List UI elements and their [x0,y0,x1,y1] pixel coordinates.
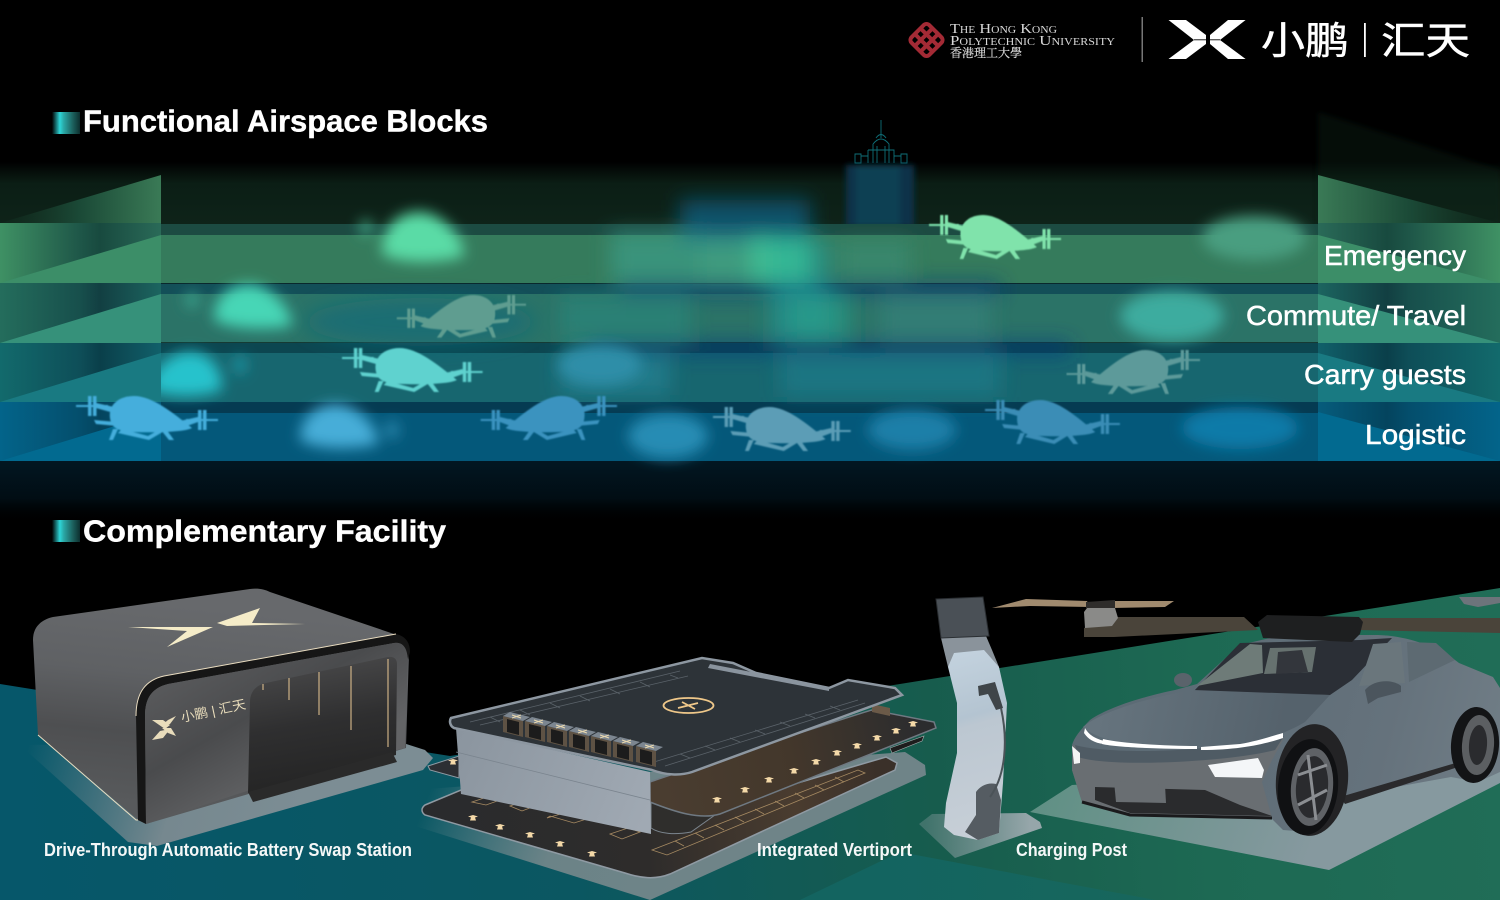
rear rotor blade [1459,597,1500,607]
label: carry guests: Carry guests [1304,359,1466,390]
bottom deck [422,757,897,878]
logo: XPeng AeroHT wordmark: 汇天 [1381,21,1470,63]
logo: XPeng AeroHT wordmark [1261,21,1470,63]
caption: charging post: Charging Post [1016,840,1127,860]
side sill [1340,762,1459,804]
band: emergency [0,224,1500,283]
roof emblem [664,698,714,713]
band: logistic [0,402,1500,461]
building side [456,728,651,834]
platform: flying car [1030,760,1500,870]
front rotor blades [992,599,1174,608]
caption: battery swap station: Drive-Through Automatic Battery Swap Station [44,840,412,860]
fascia upper band [1075,736,1284,763]
charging cable [990,708,1005,797]
bottom parking bays [472,770,865,855]
rear wheel [1448,705,1500,785]
roof battery modules [503,712,663,767]
logo: XPeng mark [1168,20,1246,59]
light edge [38,634,396,820]
hood [1083,690,1330,747]
roof parking grid [470,671,865,766]
post body [944,650,1007,840]
logo: PolyU name: 香港理工大學 [950,45,1022,60]
platform: integrated vertiport [415,752,926,900]
band: commute [0,284,1500,342]
right wall [1318,175,1500,461]
bottom lip [1082,802,1272,818]
eVTOL: logistic far left [76,396,218,440]
wire skyline tower [855,120,907,163]
blurred eVTOLs [150,212,1306,458]
station emblem and name: 小鹏 | 汇天 [180,697,247,725]
eVTOL: logistic right [985,400,1120,444]
eVTOL: carry guests right [1067,350,1200,394]
charging post [936,597,1007,840]
roof raised bar [708,664,829,691]
number plate [1114,781,1166,803]
post neck [941,636,999,667]
small rear deck [428,756,459,778]
panel: complementary facility [0,588,1500,900]
platform: battery swap station [20,742,433,846]
divider [1142,17,1143,62]
eVTOL: logistic centre [481,396,617,440]
roof deck [450,658,902,774]
platform: charging post [919,813,1042,858]
bottom deck arrows [448,759,597,856]
middle deck arrows [712,721,918,802]
upper haze [0,162,1500,224]
side lamp [1072,746,1080,764]
rear dark ledge [890,736,924,753]
front motor [1084,604,1118,628]
station ramp [248,752,397,802]
windscreen glass [1197,644,1263,686]
right wall upper haze [1318,112,1500,224]
doorway light strips [263,659,388,747]
logo: PolyU emblem [909,22,944,58]
front fascia [1072,738,1284,818]
logo: XPeng AeroHT wordmark: 小鹏 [1261,21,1349,63]
front wheel [1271,721,1353,839]
roof logo [128,608,305,647]
logo: PolyU name [950,22,1115,60]
panel: functional airspace blocks [0,112,1500,523]
label: emergency: Emergency [1324,240,1466,271]
cabin seat patch [1264,647,1316,674]
left wall [0,175,161,461]
eVTOL: carry guests left [342,348,483,392]
windscreen and cabin [1193,638,1392,695]
side mirror right [1365,681,1401,704]
rotor cap [1086,600,1115,608]
side mirror left [1174,673,1192,687]
station shell roof and side [33,589,409,824]
band: carry guests [0,343,1500,402]
rotor hub [1258,615,1363,642]
battery swap station [33,589,410,824]
caption: integrated vertiport: Integrated Vertiport [757,840,912,860]
heading: functional airspace blocks: Functional Airspace Blocks [83,104,488,138]
integrated vertiport [422,658,936,878]
post plug base [965,783,1001,840]
car body [1072,635,1500,833]
station black trim [136,634,410,824]
middle deck [650,710,936,816]
support posts [872,704,890,716]
station emblem and name [152,697,247,740]
label: logistic: Logistic [1365,419,1466,450]
eVTOL: emergency [929,215,1061,259]
lower haze [0,461,1500,523]
station front wall [145,643,408,824]
logo: PolyU name: The Hong Kong [950,22,1057,37]
label: commute travel: Commute/ Travel [1246,300,1466,331]
flying car [992,597,1500,839]
blurred city reflection [305,200,1070,397]
hazy blue tower [846,165,914,227]
rotor arm left [1084,617,1258,637]
ground plane [0,588,1500,900]
lower floor corner [651,790,715,834]
headlight bar [1084,728,1283,750]
side windows [1359,642,1405,686]
header logos [909,17,1470,63]
eVTOL: commute [397,295,526,338]
post screen [936,597,989,638]
seat [1276,650,1308,674]
logo: PolyU name: Polytechnic University [950,34,1115,49]
eVTOL: logistic mid [713,407,851,451]
ground lower strip [800,852,1155,900]
headlamp [1208,758,1264,778]
connector holster [978,682,1003,710]
lower grille [1095,787,1272,816]
station doorway [248,657,397,793]
rotor arm right [1358,618,1500,633]
heading: complementary facility: Complementary Facility [83,514,447,548]
